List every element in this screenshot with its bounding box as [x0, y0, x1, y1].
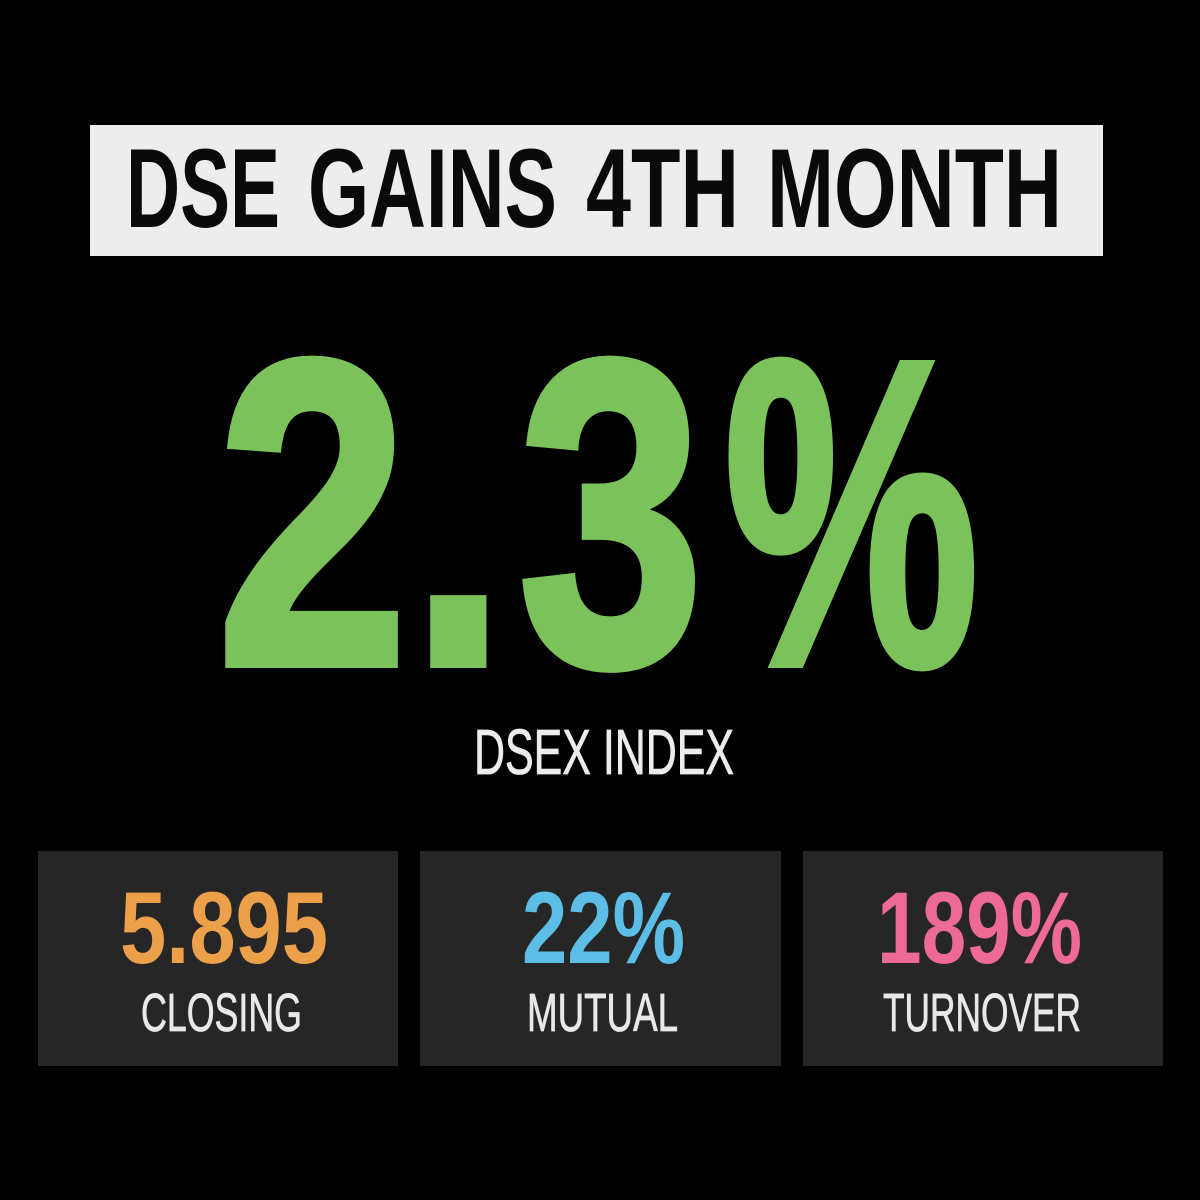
turnover label: TURNOVER — [883, 983, 1081, 1043]
title banner — [90, 125, 1103, 256]
panel: turnover — [803, 851, 1163, 1066]
title: DSE — [126, 126, 280, 251]
headline figure: % — [724, 270, 979, 757]
title: MONTH — [767, 126, 1062, 251]
title: GAINS — [308, 126, 557, 251]
headline figure: 3 — [518, 270, 704, 757]
closing value: 5.895 — [120, 871, 328, 985]
turnover value: 189% — [877, 871, 1082, 985]
mutual value: 22% — [522, 871, 685, 985]
panel: closing — [38, 851, 398, 1066]
mutual label: MUTUAL — [527, 983, 678, 1043]
headline figure: 2 — [216, 270, 408, 757]
panel: mutual — [420, 851, 781, 1066]
closing label: CLOSING — [141, 983, 302, 1043]
headline figure: . — [410, 270, 508, 757]
headline label: DSEX INDEX — [474, 716, 734, 788]
title: 4TH — [586, 126, 739, 251]
